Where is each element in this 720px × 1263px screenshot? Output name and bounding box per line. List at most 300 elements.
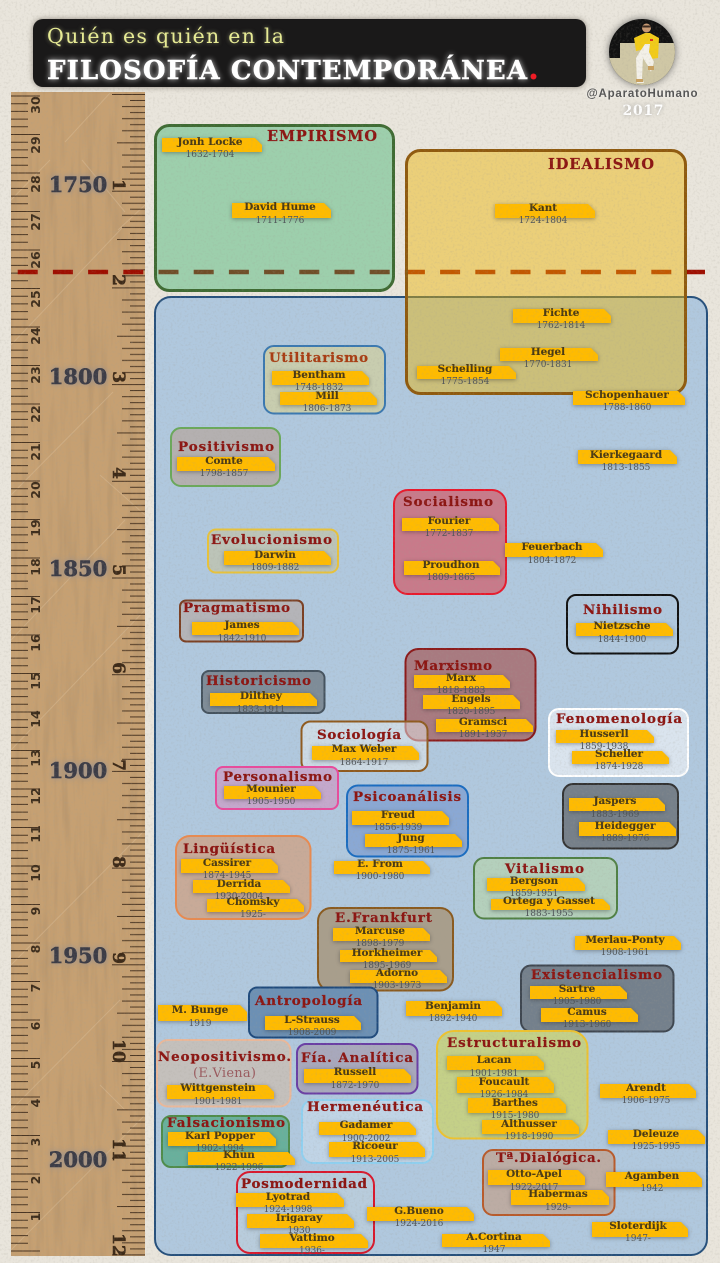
tag: Wittgenstein: 1901-1981	[194, 1097, 242, 1107]
tag: Lyotrad: Lyotrad	[266, 1191, 311, 1203]
tag: Ricoeur	[329, 1140, 425, 1165]
tag: Gadamer: 1900-2002	[342, 1134, 390, 1144]
tag: Fichte: 1762-1814	[537, 321, 586, 331]
tag: Deleuze	[608, 1128, 705, 1152]
tag: Engels: Engels	[451, 693, 491, 705]
subheading: E.Viena: (E.Viena)	[193, 1066, 256, 1081]
heading: filosofia analitica: Fía. Analítica	[301, 1050, 413, 1066]
tag: Otto-Apel: Otto-Apel	[506, 1168, 562, 1180]
tag: M. Bunge	[158, 1004, 247, 1029]
panel: evolucionismo	[208, 530, 338, 573]
tag: L-Strauss: 1908-2009	[288, 1028, 337, 1038]
tag: E. From: E. From	[357, 858, 403, 870]
tag: James: 1842-1910	[218, 634, 267, 644]
wooden ruler timeline: 12	[28, 787, 43, 805]
tag: Gramsci	[436, 716, 533, 740]
tag: Deleuze: Deleuze	[633, 1128, 680, 1140]
tag: Dilthey: 1833-1911	[237, 705, 285, 715]
tag: Dilthey: Dilthey	[240, 690, 283, 702]
panel: posmodernidad	[236, 1172, 374, 1256]
heading: neopositivismo: Neopositivismo.	[158, 1049, 291, 1065]
panel: marxismo	[406, 649, 536, 740]
tag: Max Weber	[312, 743, 419, 768]
wooden ruler timeline: 11	[108, 1138, 128, 1162]
panel: e.frankfurt	[318, 908, 453, 991]
tag: Khun	[188, 1149, 295, 1173]
wooden ruler timeline: 30	[28, 96, 43, 114]
panel: Jaspers and Heidegger group	[563, 784, 678, 848]
tag: Marcuse	[333, 925, 430, 949]
tag: Mill: 1806-1873	[303, 404, 352, 414]
tag: David Hume: David Hume	[244, 201, 316, 213]
heading: historicismo: Historicismo	[206, 673, 311, 689]
tag: Adorno	[350, 967, 447, 991]
wooden ruler timeline	[11, 92, 145, 1257]
tag: G.Bueno: G.Bueno	[394, 1205, 444, 1217]
wooden ruler timeline: 6	[108, 662, 128, 674]
tag: Sloterdijk	[592, 1220, 688, 1244]
tag: Hegel: Hegel	[531, 346, 565, 358]
tag: L-Strauss: L-Strauss	[284, 1014, 340, 1026]
tag: Lacan: Lacan	[477, 1054, 512, 1066]
tag: Wittgenstein	[167, 1082, 274, 1107]
tag: Sartre: Sartre	[559, 983, 596, 995]
tag: Comte	[177, 455, 275, 479]
heading: posmodernidad: Posmodernidad	[241, 1176, 368, 1192]
tag: Cassirer: Cassirer	[203, 857, 252, 869]
wooden ruler timeline: 8	[108, 856, 128, 868]
tag: Engels: 1820-1895	[447, 707, 496, 717]
tag: Schopenhauer: 1788-1860	[603, 403, 652, 413]
tag: Husserll: 1859-1938	[580, 742, 629, 752]
tag: Vattimo: 1936-	[299, 1246, 325, 1256]
wooden ruler timeline: 3	[28, 1138, 43, 1146]
tag: Schelling: 1775-1854	[441, 377, 490, 387]
wooden ruler timeline: 4	[28, 1098, 43, 1107]
tag: Fourier: 1772-1837	[425, 529, 474, 539]
tag: Althusser: 1918-1990	[505, 1132, 554, 1142]
tag: Gramsci: 1891-1937	[459, 730, 508, 740]
tag: Max Weber: 1864-1917	[340, 758, 389, 768]
tag: Proudhon: Proudhon	[422, 559, 480, 571]
tag: Russell	[304, 1066, 411, 1091]
wooden ruler timeline: 19	[28, 519, 43, 537]
heading: hermeneutica: Hermenéutica	[307, 1099, 423, 1115]
tag: Deleuze: 1925-1995	[632, 1142, 681, 1152]
tag: Sartre	[530, 983, 627, 1007]
tag: Bentham: Bentham	[292, 369, 346, 381]
tag: Vattimo: Vattimo	[288, 1232, 335, 1244]
tag: Darwin: 1809-1882	[251, 563, 299, 573]
tag: Horkheimer: Horkheimer	[352, 947, 423, 959]
tag: Heidegger: 1889-1976	[601, 834, 650, 844]
wooden ruler timeline: 25	[28, 290, 43, 308]
tag: L-Strauss	[265, 1014, 361, 1038]
tag: Darwin	[224, 549, 331, 573]
tag: Foucault	[457, 1076, 554, 1100]
wooden ruler timeline: 18	[28, 558, 43, 576]
tag: M. Bunge: 1919	[189, 1019, 212, 1029]
tag: Russell: 1872-1970	[331, 1081, 380, 1091]
heading: utilitarismo: Utilitarismo	[269, 350, 368, 366]
panel: falsacionismo	[162, 1115, 295, 1173]
tag: Ortega y Gasset: 1883-1955	[525, 909, 574, 919]
wooden ruler timeline: 26	[28, 251, 43, 269]
tag: Kant: Kant	[529, 202, 557, 214]
tag: David Hume	[232, 201, 331, 226]
tag: Adorno: 1903-1973	[373, 981, 422, 991]
panel: linguistica	[176, 836, 310, 920]
tag: Lacan: 1901-1981	[470, 1069, 518, 1079]
wooden ruler timeline: 20	[28, 481, 43, 499]
tag: Bergson	[487, 875, 585, 899]
tag: Schelling: Schelling	[438, 363, 493, 375]
wooden ruler timeline: 22	[28, 405, 43, 423]
tag: Lacan	[447, 1054, 544, 1079]
tag: Engels	[423, 693, 520, 717]
tag: Merlau-Ponty	[575, 934, 681, 958]
tag: Feuerbach: 1804-1872	[528, 556, 576, 566]
heading: pragmatismo: Pragmatismo	[183, 600, 290, 616]
tag: Nietzsche: Nietzsche	[593, 620, 651, 632]
tag: Otto-Apel	[488, 1168, 585, 1193]
wooden ruler timeline: 1750	[49, 172, 107, 197]
tag: Chomsky	[207, 896, 304, 920]
panel: pragmatismo	[180, 600, 303, 644]
tag: Ricoeur: 1913-2005	[351, 1155, 400, 1165]
title banner	[33, 19, 586, 87]
tag: Merlau-Ponty: 1908-1961	[601, 948, 649, 958]
tag: Mounier: 1905-1950	[247, 797, 296, 807]
tag: Scheller: 1874-1928	[595, 762, 644, 772]
tag: Fichte	[513, 307, 611, 331]
tag: Khun: 1922-1996	[215, 1163, 264, 1173]
tag: James: James	[223, 619, 260, 631]
tag: Irigaray: Irigaray	[276, 1212, 323, 1224]
heading: vitalismo: Vitalismo	[504, 861, 584, 877]
tag: Lyotrad: 1924-1998	[264, 1205, 313, 1215]
author avatar icon	[600, 19, 680, 90]
wooden ruler timeline: 14	[28, 710, 43, 728]
panel: main contemporary era background	[155, 297, 707, 1255]
tag: Proudhon: 1809-1865	[427, 573, 476, 583]
tag: Agamben: 1942	[641, 1184, 663, 1194]
tag: Schelling	[417, 363, 516, 387]
wooden ruler timeline: 16	[28, 634, 43, 652]
tag: Barthes	[468, 1097, 566, 1121]
panel: historicismo	[202, 671, 324, 715]
tag: Habermas: 1929-	[545, 1203, 571, 1213]
tag: Derrida	[193, 878, 290, 902]
tag: G.Bueno	[367, 1205, 474, 1229]
tag: Arendt	[600, 1082, 696, 1106]
wooden ruler timeline: 15	[28, 672, 43, 690]
wooden ruler timeline: 7	[108, 759, 128, 771]
tag: Jung	[365, 832, 462, 856]
tag: Mill	[280, 390, 377, 414]
tag: Wittgenstein: Wittgenstein	[179, 1082, 256, 1094]
panel: positivismo	[171, 428, 280, 486]
heading: existencialismo: Existencialismo	[531, 967, 662, 983]
wooden ruler timeline: 29	[28, 136, 43, 154]
tag: Mill: Mill	[315, 390, 339, 402]
tag: Kierkegaard: Kierkegaard	[590, 449, 663, 461]
tag: Merlau-Ponty: Merlau-Ponty	[586, 934, 665, 946]
tag: Camus: Camus	[567, 1006, 607, 1018]
tag: Nietzsche: 1844-1900	[598, 635, 647, 645]
wooden ruler timeline: 1900	[49, 758, 107, 783]
tag: Mounier: Mounier	[246, 783, 296, 795]
heading: nihilismo: Nihilismo	[583, 602, 662, 618]
panel: existencialismo	[521, 966, 674, 1032]
tag: Schopenhauer	[573, 389, 685, 413]
tag: Camus: 1913-1960	[563, 1020, 612, 1030]
heading: positivismo: Positivismo	[178, 439, 274, 455]
wooden ruler timeline: 2	[108, 274, 128, 286]
heading: empirismo: EMPIRISMO	[267, 128, 377, 145]
wooden ruler timeline: 1	[28, 1213, 43, 1221]
tag: Barthes: 1915-1980	[491, 1111, 540, 1121]
heading: marxismo: Marxismo	[414, 658, 492, 674]
panel: estructuralismo	[437, 1031, 588, 1142]
panel: fenomenologia	[549, 709, 688, 776]
tag: Gramsci: Gramsci	[459, 716, 507, 728]
wooden ruler timeline: 21	[28, 443, 43, 461]
tag: Max Weber: Max Weber	[332, 743, 397, 755]
tag: Marx	[414, 672, 510, 696]
tag: Darwin: Darwin	[254, 549, 296, 561]
tag: Lyotrad	[236, 1191, 344, 1215]
heading: linguistica: Lingüística	[183, 841, 275, 857]
tag: Nietzsche	[576, 620, 673, 645]
heading: psicoanalisis: Psicoanálisis	[353, 789, 461, 805]
heading: estructuralismo: Estructuralismo	[447, 1035, 581, 1051]
tag: Kierkegaard: 1813-1855	[602, 463, 651, 473]
tag: Freud	[352, 809, 449, 833]
tag: Fourier	[402, 515, 499, 539]
tag: Bergson: 1859-1951	[510, 889, 558, 899]
tag: E. From: 1900-1980	[356, 872, 405, 882]
wooden ruler timeline: 7	[28, 984, 43, 992]
tag: Marcuse: Marcuse	[355, 925, 405, 937]
tag: Karl Popper: Karl Popper	[185, 1130, 255, 1142]
tag: G.Bueno: 1924-2016	[395, 1219, 444, 1229]
tag: Jaspers	[569, 795, 665, 820]
tag: Fourier: Fourier	[428, 515, 471, 527]
heading: falsacionismo: Falsacionismo	[167, 1115, 285, 1131]
tag: Karl Popper: 1902-1994	[196, 1144, 245, 1154]
tag: David Hume: 1711-1776	[256, 216, 305, 226]
tag: Habermas	[511, 1188, 609, 1213]
tag: Derrida: 1930-2004	[215, 892, 264, 902]
tag: Bentham	[272, 369, 369, 393]
wooden ruler timeline: 13	[28, 749, 43, 767]
wooden ruler timeline: 5	[108, 564, 128, 576]
tag: Hegel	[500, 346, 598, 370]
tag: E. From	[334, 858, 430, 882]
tag: Bentham: 1748-1832	[295, 383, 343, 393]
tag: Bergson: Bergson	[510, 875, 559, 887]
tag: Cassirer	[181, 857, 278, 881]
heading: antropologia: Antropología	[254, 993, 362, 1009]
tag: Otto-Apel: 1922-2017	[510, 1183, 559, 1193]
dashed era divider line	[18, 270, 705, 274]
tag: Jaspers: 1883-1969	[591, 810, 640, 820]
wooden ruler timeline: 12	[108, 1233, 128, 1257]
tag: Agamben	[606, 1170, 702, 1194]
wooden ruler timeline: 11	[28, 825, 43, 843]
tag: Ortega y Gasset	[491, 895, 610, 919]
tag: Arendt: 1906-1975	[622, 1096, 671, 1106]
heading: sociologia: Sociología	[317, 727, 401, 743]
tag: Jung: Jung	[396, 832, 425, 844]
tag: Derrida: Derrida	[217, 878, 262, 890]
wooden ruler timeline: 3	[108, 371, 128, 383]
tag: Proudhon	[404, 559, 500, 583]
wooden ruler timeline: 1850	[49, 556, 107, 581]
tag: Scheller: Scheller	[595, 748, 644, 760]
panel: sociologia	[302, 722, 428, 771]
tag: Barthes: Barthes	[492, 1097, 538, 1109]
wooden ruler timeline: 9	[28, 907, 43, 915]
tag: Mounier	[224, 783, 321, 807]
wooden ruler timeline: 5	[28, 1061, 43, 1069]
wooden ruler timeline: 28	[28, 175, 43, 193]
tag: Sloterdijk: Sloterdijk	[609, 1220, 668, 1232]
wooden ruler timeline: 1800	[49, 364, 107, 389]
tag: Agamben: Agamben	[624, 1170, 680, 1182]
wooden ruler timeline: 10	[28, 864, 43, 882]
tag: Chomsky: 1925-	[240, 910, 266, 920]
author handle: @AparatoHumano	[586, 88, 698, 100]
wooden ruler timeline: 2000	[49, 1147, 107, 1172]
tag: Cassirer: 1874-1945	[203, 871, 252, 881]
tag: Schopenhauer: Schopenhauer	[585, 389, 669, 401]
panel: psicoanalisis	[347, 786, 468, 856]
tag: Jaspers: Jaspers	[593, 795, 636, 807]
tag: Jonh Locke: Jonh Locke	[177, 136, 243, 148]
tag: Khun: Khun	[223, 1149, 255, 1161]
tag: Camus	[541, 1006, 638, 1030]
tag: M. Bunge: M. Bunge	[172, 1004, 229, 1016]
tag: Althusser: Althusser	[500, 1118, 557, 1130]
tag: Horkheimer	[340, 947, 437, 971]
tag: Marcuse: 1898-1979	[356, 939, 405, 949]
panel: filosofia analitica	[297, 1044, 418, 1094]
wooden ruler timeline: 1950	[49, 943, 107, 968]
title banner: FILOSOFÍA CONTEMPORÁNEA	[47, 54, 528, 86]
tag: Freud: 1856-1939	[374, 823, 423, 833]
tag: Benjamin: Benjamin	[425, 1000, 481, 1012]
tag: Sartre: 1905-1980	[553, 997, 602, 1007]
tag: Horkheimer: 1895-1969	[363, 961, 412, 971]
panel: antropologia	[249, 988, 378, 1038]
panel: personalismo	[216, 767, 338, 809]
tag: Adorno: Adorno	[375, 967, 418, 979]
panel: idealismo	[406, 150, 686, 394]
tag: Freud: Freud	[381, 809, 416, 821]
title banner: Quién es quién en la	[47, 24, 284, 48]
heading: fenomenologia: Fenomenología	[556, 711, 682, 727]
panel: socialismo	[394, 490, 506, 594]
panel: empirismo	[156, 126, 394, 290]
tag: Ortega y Gasset: Ortega y Gasset	[503, 895, 595, 907]
panel: nihilismo	[567, 595, 678, 654]
tag: Marx: 1818-1883	[437, 686, 486, 696]
wooden ruler timeline: 17	[28, 596, 43, 614]
panel: vitalismo	[474, 858, 617, 919]
heading: socialismo: Socialismo	[403, 494, 493, 510]
tag: Karl Popper	[168, 1130, 276, 1154]
tag: Heidegger: Heidegger	[595, 820, 656, 832]
panel: utilitarismo	[264, 346, 385, 414]
tag: Fichte: Fichte	[543, 307, 580, 319]
heading: e.frankfurt: E.Frankfurt	[335, 910, 433, 926]
tag: Benjamin: 1892-1940	[429, 1014, 478, 1024]
wooden ruler timeline: 4	[108, 467, 128, 479]
tag: Scheller	[572, 748, 669, 772]
tag: Sloterdijk: 1947-	[625, 1234, 651, 1244]
wooden ruler timeline: 10	[108, 1039, 128, 1063]
tag: Jonh Locke: 1632-1704	[186, 150, 235, 160]
heading: idealismo: IDEALISMO	[548, 156, 654, 173]
tag: Comte: Comte	[205, 455, 243, 467]
heading: evolucionismo: Evolucionismo	[211, 532, 332, 548]
tag: Benjamin	[406, 1000, 502, 1024]
tag: Ricoeur: Ricoeur	[352, 1140, 398, 1152]
tag: Feuerbach	[505, 541, 603, 566]
tag: Kierkegaard	[578, 449, 677, 473]
panel: neopositivismo	[157, 1040, 291, 1107]
tag: Irigaray: 1930	[288, 1226, 311, 1236]
wooden ruler timeline: 27	[28, 213, 43, 231]
tag: Comte: 1798-1857	[200, 469, 249, 479]
tag: Heidegger	[579, 820, 676, 844]
panel: teoria dialogica	[483, 1150, 614, 1215]
tag: Habermas: Habermas	[528, 1188, 588, 1200]
tag: Foucault: Foucault	[479, 1076, 530, 1088]
tag: Jonh Locke	[162, 136, 262, 160]
tag: A.Cortina: 1947	[483, 1245, 506, 1255]
tag: Foucault: 1926-1984	[480, 1090, 529, 1100]
tag: Marx: Marx	[446, 672, 477, 684]
heading: teoria dialogica: Tª.Dialógica.	[496, 1150, 601, 1166]
tag: Hegel: 1770-1831	[524, 360, 572, 370]
tag: Chomsky: Chomsky	[227, 896, 280, 908]
tag: Jung: 1875-1961	[387, 846, 435, 856]
wooden ruler timeline: 24	[28, 327, 43, 345]
tag: Gadamer: Gadamer	[340, 1119, 393, 1131]
tag: Althusser	[482, 1118, 579, 1142]
tag: Gadamer	[319, 1119, 416, 1144]
tag: Vattimo	[260, 1232, 368, 1256]
tag: Husserll	[556, 728, 654, 752]
wooden ruler timeline: 6	[28, 1021, 43, 1030]
wooden ruler timeline: 2	[28, 1176, 43, 1184]
tag: A.Cortina	[442, 1231, 550, 1255]
tag: James	[192, 619, 299, 644]
tag: Kant	[495, 202, 595, 226]
tag: Kant: 1724-1804	[519, 216, 568, 226]
tag: Feuerbach: Feuerbach	[522, 541, 583, 553]
wooden ruler timeline: 8	[28, 945, 43, 953]
tag: Husserll: Husserll	[579, 728, 629, 740]
heading: personalismo: Personalismo	[223, 769, 332, 785]
panel: hermeneutica	[302, 1099, 433, 1165]
tag: Irigaray	[247, 1212, 354, 1236]
tag: Arendt: Arendt	[625, 1082, 666, 1094]
wooden ruler timeline: 23	[28, 366, 43, 384]
